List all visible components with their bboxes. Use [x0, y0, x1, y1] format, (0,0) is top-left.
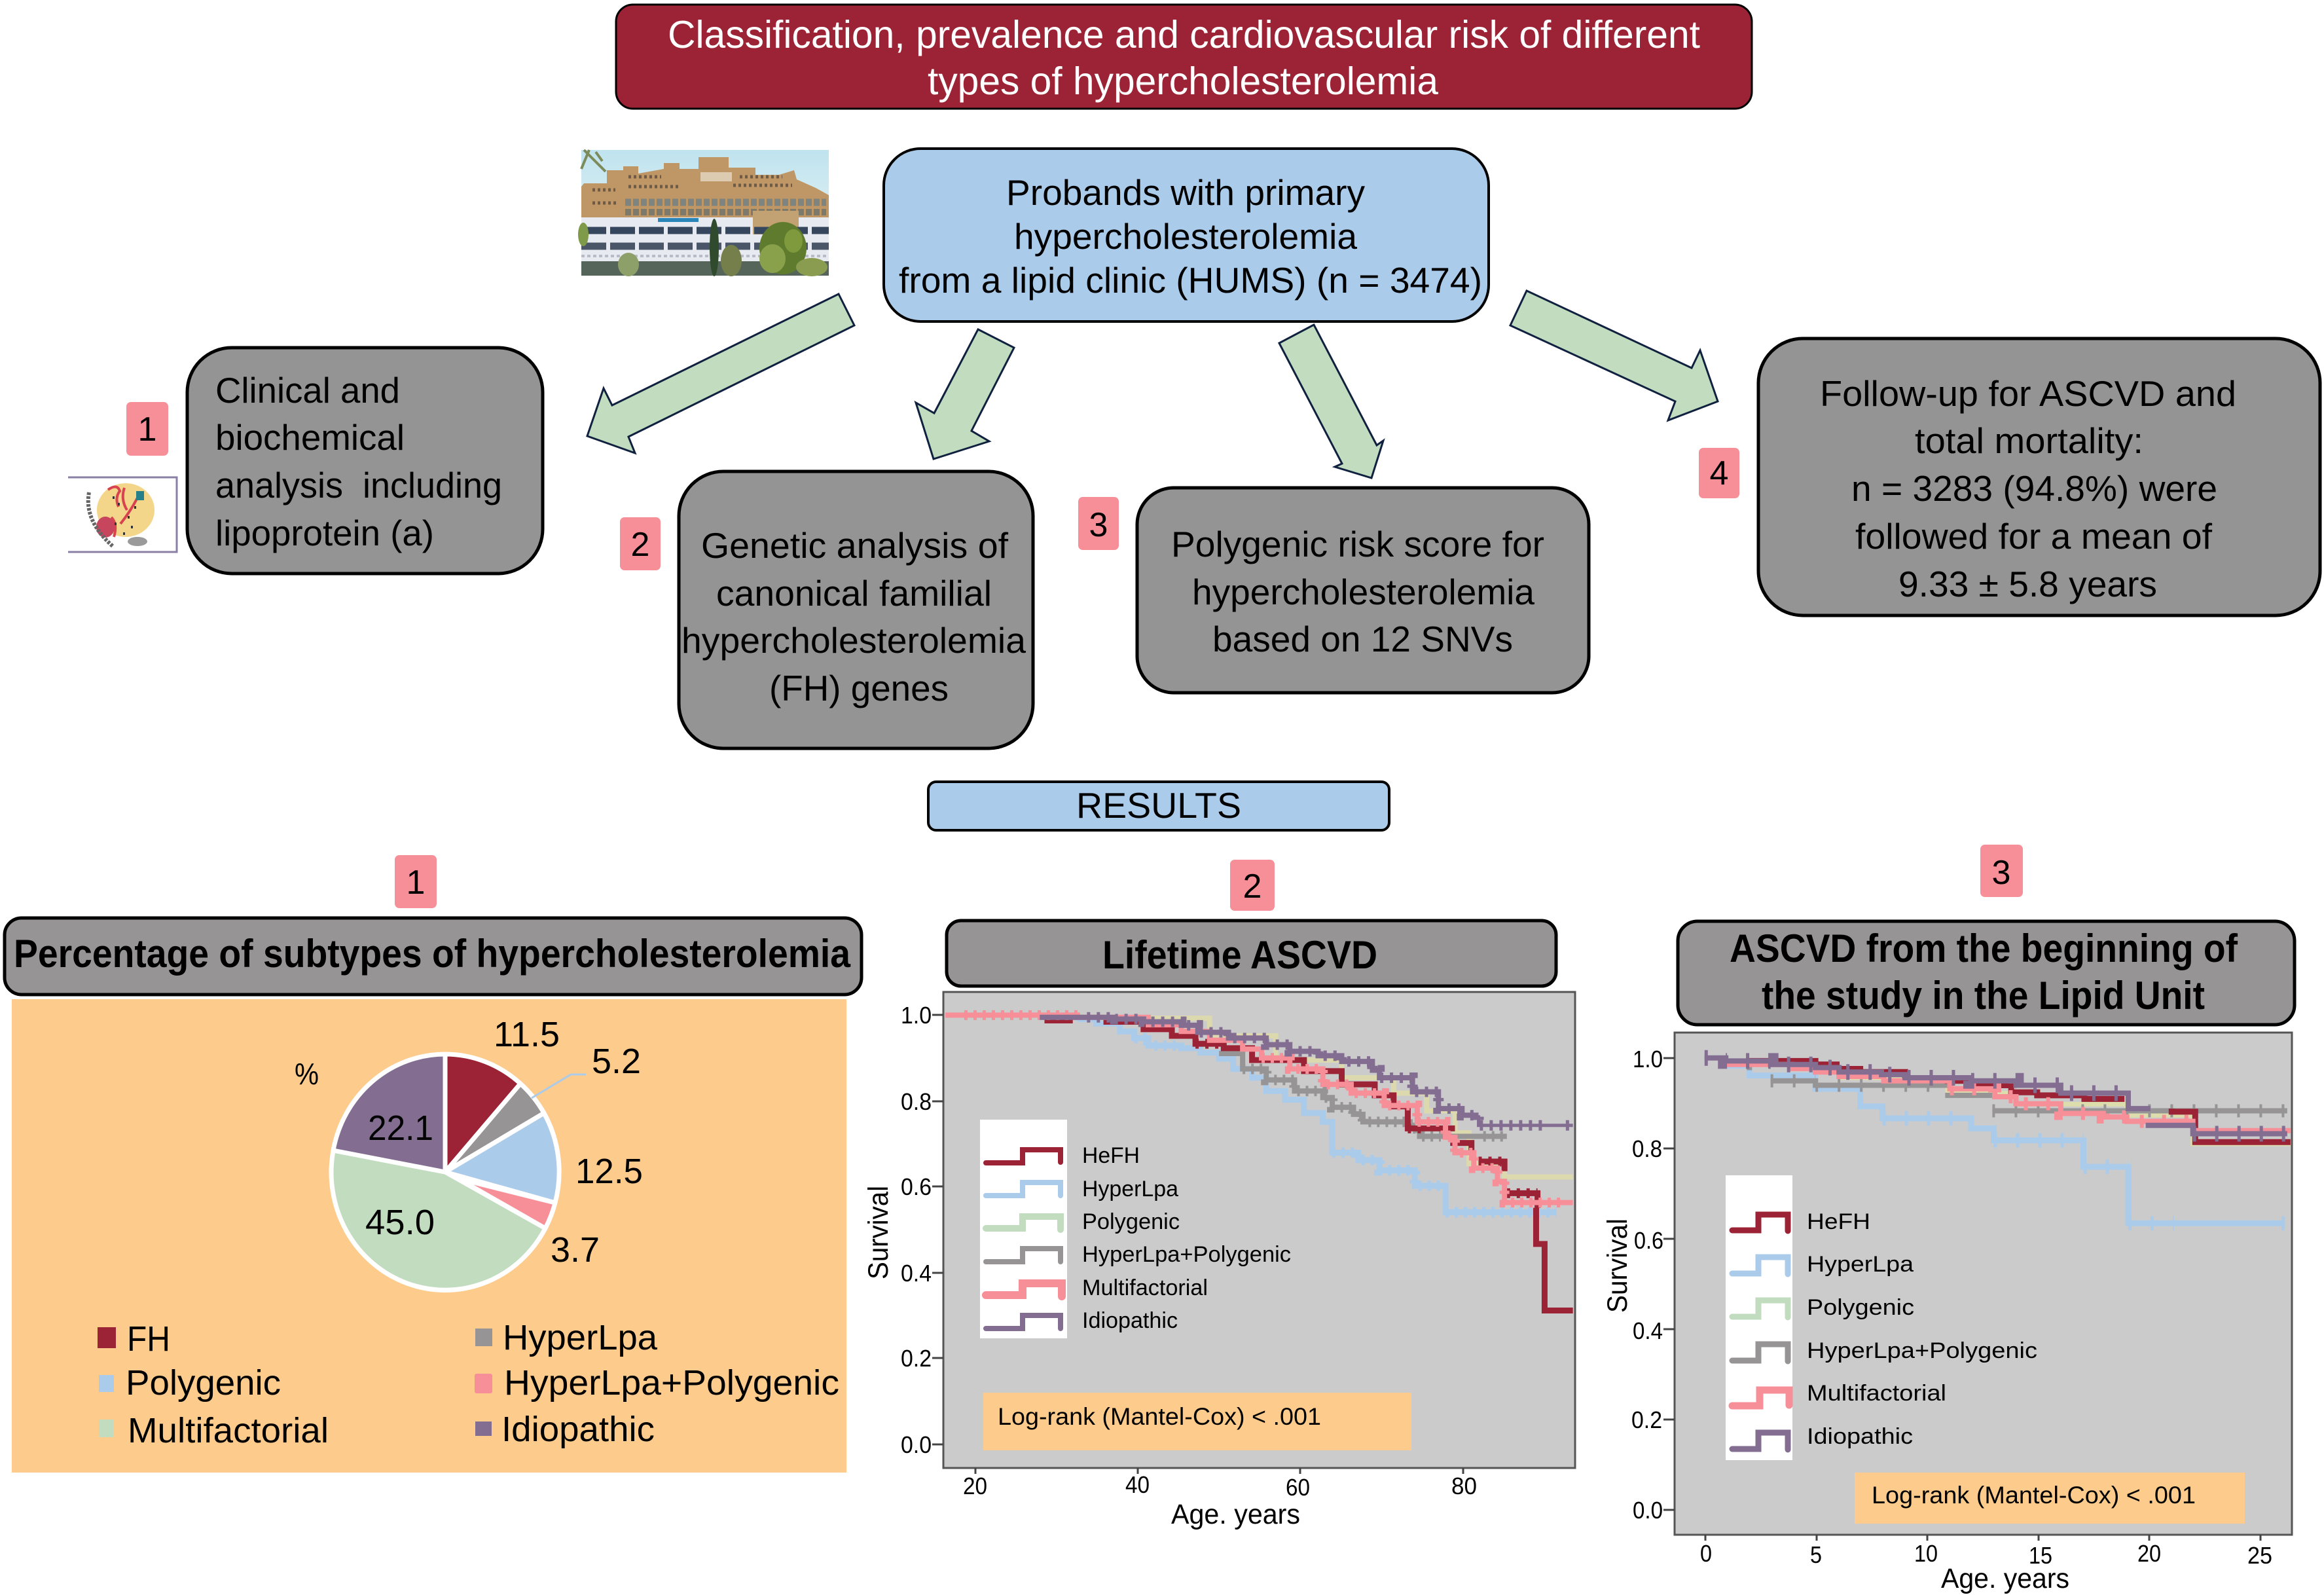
panel: clinical and biochemical analysis: lipoprotein (a) — [215, 513, 434, 553]
legend: Polygenic — [1082, 1209, 1180, 1234]
badge: method 2 — [620, 517, 661, 570]
x axis title: Age. years — [1171, 1499, 1300, 1530]
legend — [980, 1120, 1291, 1338]
title — [616, 5, 1752, 109]
y axis title: Survival — [1602, 1219, 1633, 1313]
pie value labels: 22.1 — [368, 1109, 433, 1148]
heading: results — [928, 782, 1389, 830]
y axis ticks and labels: 0.2 — [1631, 1406, 1662, 1433]
x axis ticks and labels — [1700, 1535, 2272, 1569]
heading: lifetime ASCVD: Lifetime ASCVD — [1102, 933, 1377, 977]
heading: percentage of subtypes: Percentage of subtypes of hypercholesterolemia — [14, 932, 851, 976]
log-rank callout: Log-rank (Mantel-Cox) < .001 — [1872, 1482, 2196, 1509]
title: types of hypercholesterolemia — [928, 60, 1438, 103]
heading: lifetime ASCVD — [947, 921, 1556, 986]
y axis title: Survival — [863, 1186, 894, 1279]
x axis ticks and labels: 20 — [2137, 1540, 2161, 1567]
y axis ticks and labels: 0.8 — [901, 1088, 932, 1115]
pie value labels: 3.7 — [551, 1230, 600, 1270]
y axis ticks and labels — [1631, 1046, 1675, 1524]
pie legend: FH — [127, 1319, 170, 1359]
panel: genetic analysis: hypercholesterolemia — [681, 620, 1026, 661]
pie value labels: 11.5 — [494, 1015, 560, 1054]
pie value labels: % — [295, 1057, 319, 1091]
badge: method 3: 3 — [1089, 506, 1108, 544]
pie value labels: 45.0 — [365, 1203, 435, 1242]
legend: Idiopathic — [1807, 1424, 1913, 1449]
legend: HeFH — [1807, 1209, 1870, 1234]
heading: percentage of subtypes — [5, 918, 862, 995]
y axis ticks and labels: 0.4 — [1633, 1317, 1663, 1344]
legend: HyperLpa — [1082, 1177, 1178, 1201]
legend: HyperLpa — [1807, 1252, 1914, 1277]
heading: ASCVD from the beginning: ASCVD from the beginning of — [1730, 926, 2238, 970]
panel: clinical and biochemical analysis: biochemical — [215, 417, 405, 458]
badge: method 3 — [1078, 497, 1119, 550]
panel: polygenic risk score — [1137, 488, 1589, 693]
panel: genetic analysis: Genetic analysis of — [701, 525, 1009, 566]
panel: polygenic risk score: hypercholesterolemia — [1192, 572, 1534, 612]
log-rank callout — [983, 1393, 1411, 1450]
panel: follow-up: Follow-up for ASCVD and — [1820, 373, 2236, 414]
pie legend: Polygenic — [126, 1363, 281, 1402]
x axis ticks and labels: 0 — [1700, 1540, 1712, 1567]
y axis ticks and labels: 0.0 — [1633, 1497, 1663, 1524]
legend: HyperLpa+Polygenic — [1082, 1242, 1291, 1267]
y axis ticks and labels: 0.4 — [901, 1260, 932, 1287]
badge: result 2: 2 — [1243, 868, 1262, 906]
badge: method 4 — [1699, 448, 1739, 498]
panel: follow-up — [1758, 339, 2320, 615]
arrow: to clinical analysis — [587, 294, 854, 453]
pie value labels: 12.5 — [575, 1152, 643, 1191]
panel: genetic analysis: canonical familial — [716, 573, 992, 614]
x axis ticks and labels — [963, 1468, 1477, 1501]
x axis ticks and labels: 25 — [2247, 1542, 2272, 1569]
badge: method 1: 1 — [138, 411, 156, 449]
legend — [1726, 1175, 2037, 1460]
panel: probands: hypercholesterolemia — [1014, 216, 1357, 257]
y axis ticks and labels: 0.8 — [1632, 1135, 1662, 1162]
heading: results: RESULTS — [1076, 785, 1241, 826]
x axis ticks and labels: 40 — [1125, 1471, 1150, 1498]
pie legend: Idiopathic — [501, 1410, 655, 1449]
pie value labels: 5.2 — [592, 1042, 641, 1081]
pie legend: HyperLpa+Polygenic — [504, 1363, 839, 1402]
legend: Polygenic — [1807, 1295, 1914, 1320]
y axis ticks and labels: 0.6 — [1634, 1227, 1663, 1254]
y axis ticks and labels: 1.0 — [1633, 1046, 1663, 1072]
x axis ticks and labels: 10 — [1914, 1540, 1938, 1567]
panel: clinical and biochemical analysis — [187, 348, 543, 574]
panel: clinical and biochemical analysis: analysis including — [215, 465, 502, 505]
panel: genetic analysis: (FH) genes — [769, 668, 949, 708]
legend: Multifactorial — [1807, 1381, 1946, 1406]
photo: hospital building — [578, 150, 829, 276]
badge: method 1 — [126, 402, 168, 456]
legend: Idiopathic — [1082, 1308, 1178, 1333]
panel: polygenic risk score: based on 12 SNVs — [1212, 619, 1513, 659]
log-rank callout — [1855, 1473, 2245, 1524]
badge: result 3: 3 — [1992, 854, 2010, 892]
arrow: to polygenic risk score — [1279, 325, 1383, 478]
pie value labels — [295, 1015, 643, 1270]
panel: polygenic risk score: Polygenic risk score for — [1171, 524, 1544, 564]
panel: probands — [884, 149, 1489, 321]
badge: result 2 — [1230, 860, 1275, 911]
y axis ticks and labels: 1.0 — [901, 1002, 932, 1029]
panel: follow-up: n = 3283 (94.8%) were — [1851, 468, 2217, 509]
y axis ticks and labels: 0.6 — [901, 1173, 932, 1200]
panel: probands: Probands with primary — [1006, 172, 1365, 213]
y axis ticks and labels — [901, 1002, 943, 1458]
legend: HyperLpa+Polygenic — [1807, 1338, 2037, 1363]
pie chart — [330, 1054, 560, 1292]
x axis ticks and labels: 5 — [1810, 1541, 1822, 1568]
badge: result 3 — [1980, 845, 2023, 897]
icon: lipoprotein particle — [68, 477, 177, 552]
panel: follow-up: 9.33 ± 5.8 years — [1898, 564, 2157, 604]
y axis ticks and labels: 0.2 — [901, 1345, 932, 1372]
x axis ticks and labels: 20 — [963, 1473, 987, 1499]
panel: pie chart background — [12, 999, 846, 1473]
pie legend: HyperLpa — [503, 1318, 658, 1357]
arrow: to genetic analysis — [916, 329, 1014, 459]
survival curves — [1705, 1058, 2291, 1223]
heading: ASCVD from the beginning — [1678, 921, 2295, 1025]
x axis title: Age. years — [1941, 1563, 2069, 1594]
x axis ticks and labels: 15 — [2029, 1542, 2052, 1569]
survival curves — [945, 1015, 1573, 1311]
legend: HeFH — [1082, 1143, 1140, 1168]
arrow: to follow-up — [1510, 291, 1718, 420]
pie legend — [98, 1318, 839, 1450]
badge: result 1: 1 — [407, 864, 425, 902]
chart: ASCVD from study start survival curves — [1602, 1033, 2292, 1594]
pie legend: Multifactorial — [128, 1411, 329, 1450]
heading: ASCVD from the beginning: the study in the Lipid Unit — [1762, 974, 2205, 1018]
badge: method 4: 4 — [1710, 454, 1728, 492]
title: Classification, prevalence and cardiovascular risk of different — [668, 13, 1700, 56]
badge: result 1 — [395, 855, 437, 908]
x axis ticks and labels: 60 — [1286, 1474, 1310, 1501]
chart: lifetime ASCVD survival curves — [863, 992, 1575, 1530]
x axis ticks and labels: 80 — [1451, 1473, 1477, 1499]
legend: Multifactorial — [1082, 1275, 1208, 1300]
panel: probands: from a lipid clinic (HUMS) (n = 3474) — [899, 260, 1482, 301]
panel: follow-up: total mortality: — [1915, 420, 2143, 461]
leader line — [532, 1074, 586, 1098]
panel: genetic analysis — [679, 471, 1033, 748]
badge: method 2: 2 — [631, 526, 649, 564]
log-rank callout: Log-rank (Mantel-Cox) < .001 — [998, 1403, 1321, 1430]
y axis ticks and labels: 0.0 — [901, 1431, 932, 1458]
panel: follow-up: followed for a mean of — [1855, 516, 2213, 557]
panel: clinical and biochemical analysis: Clinical and — [215, 370, 400, 411]
